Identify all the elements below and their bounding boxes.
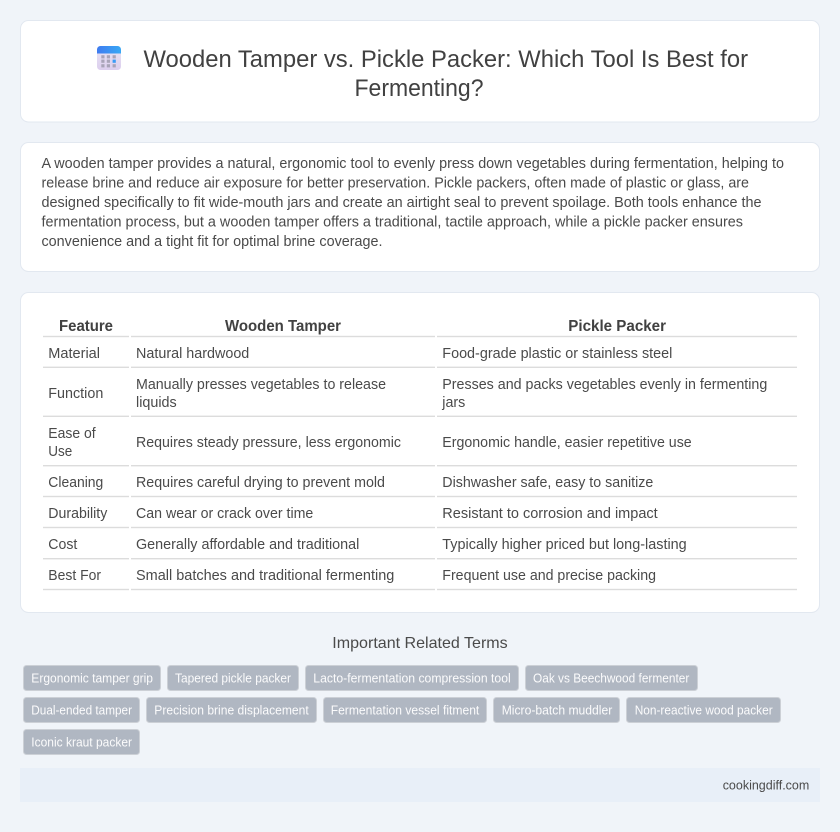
tag: Iconic kraut packer: [31, 735, 132, 749]
row: cost: Cost: [48, 537, 77, 553]
tag: [526, 666, 698, 690]
row: durability: Can wear or crack over time: [136, 506, 313, 522]
row: cleaning: Requires careful drying to prevent mold: [136, 475, 385, 491]
row: cleaning: Dishwasher safe, easy to sanitize: [442, 475, 653, 491]
footer: [20, 768, 820, 802]
footer: cookingdiff.com: [723, 777, 809, 792]
row: durability: Resistant to corrosion and impact: [442, 506, 658, 522]
row: cost: [48, 537, 687, 553]
tag: [626, 698, 780, 722]
text block: introduction: [42, 156, 784, 250]
tag: Lacto-fermentation compression tool: [313, 671, 511, 685]
tag: Dual-ended tamper: [31, 703, 132, 717]
tag: [146, 698, 316, 722]
tag: [168, 666, 298, 690]
row: durability: [48, 506, 658, 522]
row: function: liquids: [136, 395, 177, 411]
row: cost: Generally affordable and traditional: [136, 537, 359, 553]
panel: header: [20, 20, 820, 122]
tag: Ergonomic tamper grip: [31, 671, 153, 685]
text block: introduction: fermentation process, but a wooden tamper offers a traditional, tactile approach, while a pickle packer ensures: [42, 214, 743, 230]
row: cleaning: [48, 475, 653, 491]
title: Wooden Tamper vs. Pickle Packer: Which Tool Is Best for: [144, 46, 748, 73]
row: ease of use: [48, 426, 692, 460]
heading: related terms: Important Related Terms: [332, 635, 508, 652]
text block: introduction: convenience and a tight fit for optimal brine coverage.: [42, 234, 382, 250]
tag: Precision brine displacement: [154, 703, 309, 717]
row: ease of use: Use: [48, 444, 72, 460]
row: best for: [48, 568, 656, 584]
row: material: Material: [48, 346, 100, 362]
row: function: Function: [48, 386, 103, 402]
row: best for: Small batches and traditional fermenting: [136, 568, 394, 584]
tag: Oak vs Beechwood fermenter: [533, 671, 689, 685]
row: durability: Durability: [48, 506, 108, 522]
row: function: jars: [441, 395, 465, 411]
table header: [59, 318, 666, 335]
table header: Feature: [59, 318, 113, 335]
row: ease of use: Ergonomic handle, easier repetitive use: [442, 435, 692, 451]
row: ease of use: Requires steady pressure, less ergonomic: [136, 435, 401, 451]
table header: Pickle Packer: [568, 318, 666, 335]
row: function: Manually presses vegetables to release: [136, 377, 386, 393]
tags: related terms: [24, 666, 780, 754]
tag: [24, 666, 160, 690]
tag: Tapered pickle packer: [175, 671, 291, 685]
row: best for: Best For: [48, 568, 101, 584]
tag: [324, 698, 486, 722]
row: material: Natural hardwood: [136, 346, 249, 362]
row: function: [48, 377, 767, 411]
text block: introduction: release brine and reduce air exposure for better preservation. Pickle packers, often made of plastic or glass, are: [42, 176, 749, 192]
row: material: [48, 346, 672, 362]
row: cost: Typically higher priced but long-lasting: [442, 537, 687, 553]
row: cleaning: Cleaning: [48, 475, 103, 491]
icon: calendar: [97, 46, 121, 70]
row: material: Food-grade plastic or stainless steel: [442, 346, 672, 362]
row: best for: Frequent use and precise packing: [442, 568, 656, 584]
panel: introduction: [20, 142, 820, 272]
tag: Micro-batch muddler: [502, 703, 612, 717]
row: ease of use: Ease of: [48, 426, 97, 442]
tag: [306, 666, 518, 690]
tag: [24, 730, 140, 754]
tag: Non-reactive wood packer: [635, 703, 773, 717]
row: function: Presses and packs vegetables evenly in fermenting: [442, 377, 767, 393]
panel: comparison table: [20, 292, 820, 612]
table header: Wooden Tamper: [225, 318, 341, 335]
tag: [24, 698, 140, 722]
text block: introduction: A wooden tamper provides a natural, ergonomic tool to evenly press down vegetables during fermentation, helping to: [42, 156, 784, 172]
title: [144, 46, 748, 102]
text block: introduction: designed specifically to fit wide-mouth jars and create an airtight seal to prevent spoilage. Both tools enhance the: [42, 195, 762, 211]
tag: [494, 698, 620, 722]
tag: Fermentation vessel fitment: [331, 703, 480, 717]
title: Fermenting?: [354, 75, 484, 102]
